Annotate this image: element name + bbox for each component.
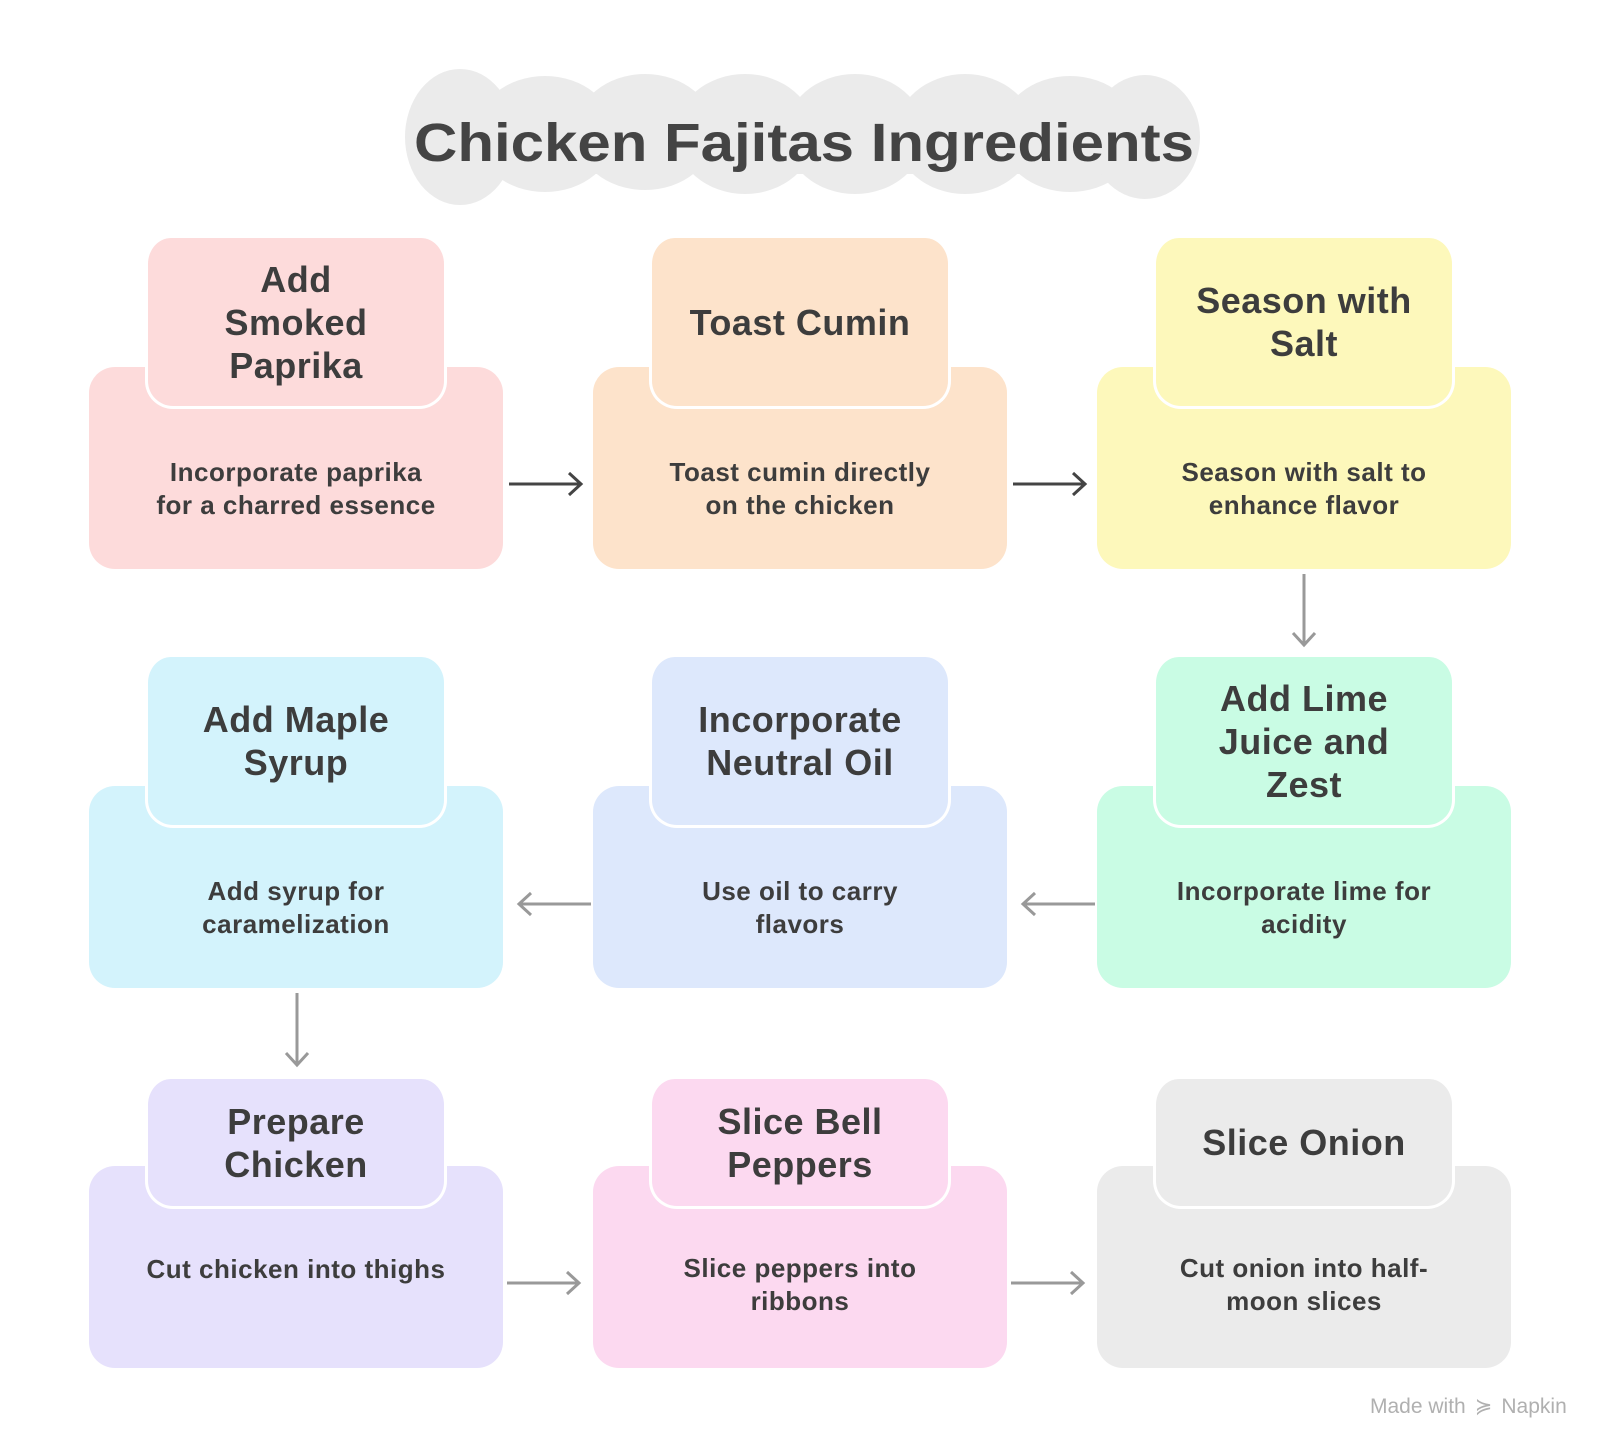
card: Add Smoked Paprika: for a charred essence — [156, 490, 436, 520]
arrow: salt down to lime — [1292, 574, 1316, 648]
card: Add Maple Syrup: Syrup — [244, 742, 348, 783]
card: Slice Onion: moon slices — [1226, 1286, 1382, 1316]
card: Add Smoked Paprika: Add — [260, 258, 332, 300]
card: Season with Salt: Season with — [1196, 280, 1412, 321]
title: Chicken Fajitas Ingredients — [414, 113, 1194, 173]
card: Add Smoked Paprika: Incorporate paprika — [170, 456, 422, 486]
card: Add Lime Juice and Zest: Add Lime — [1220, 678, 1388, 718]
watermark: ≽ — [1475, 1395, 1492, 1418]
card: Slice Bell Peppers: Slice peppers into — [684, 1253, 916, 1283]
card: Add Maple Syrup: Add Maple — [203, 699, 389, 740]
arrow: chicken to peppers — [507, 1271, 581, 1295]
card: Incorporate Neutral Oil: flavors — [756, 908, 844, 938]
arrow: syrup down to chicken — [285, 993, 309, 1068]
card: Incorporate Neutral Oil — [593, 657, 1007, 988]
card: Incorporate Neutral Oil: Incorporate — [698, 699, 902, 740]
arrow: peppers to onion — [1011, 1271, 1085, 1295]
card: Slice Onion — [1097, 1079, 1511, 1368]
card: Add Lime Juice and Zest: Juice and — [1219, 720, 1389, 762]
card: Slice Bell Peppers: Slice Bell — [717, 1100, 883, 1142]
card: Season with Salt — [1097, 238, 1511, 569]
watermark: Made with Napkin — [1370, 1395, 1567, 1418]
card: Add Lime Juice and Zest — [1097, 657, 1511, 988]
card: Season with Salt: Salt — [1270, 323, 1338, 364]
card: Add Lime Juice and Zest: acidity — [1261, 908, 1347, 938]
card: Add Maple Syrup: caramelization — [202, 908, 390, 938]
card: Season with Salt: Season with salt to — [1182, 456, 1426, 486]
card: Slice Bell Peppers: ribbons — [751, 1286, 849, 1316]
card: Prepare Chicken: Prepare — [227, 1100, 365, 1142]
arrow: lime to oil — [1020, 892, 1095, 916]
card: Add Smoked Paprika — [89, 238, 503, 569]
card: Add Lime Juice and Zest: Incorporate lime for — [1177, 876, 1431, 906]
card: Add Maple Syrup — [89, 657, 503, 988]
card: Toast Cumin: on the chicken — [705, 490, 895, 520]
arrow: oil to syrup — [516, 892, 591, 916]
card: Slice Onion: Slice Onion — [1202, 1122, 1406, 1163]
card: Incorporate Neutral Oil: Neutral Oil — [706, 742, 894, 783]
card: Slice Bell Peppers — [593, 1079, 1007, 1368]
card: Slice Onion: Cut onion into half- — [1180, 1253, 1428, 1283]
card: Prepare Chicken — [89, 1079, 503, 1368]
card: Add Lime Juice and Zest: Zest — [1266, 764, 1342, 804]
title — [405, 69, 1200, 205]
card: Prepare Chicken: Cut chicken into thighs — [147, 1254, 445, 1284]
card: Toast Cumin: Toast cumin directly — [670, 456, 930, 486]
card: Slice Bell Peppers: Peppers — [727, 1144, 873, 1184]
card: Add Smoked Paprika: Paprika — [229, 344, 363, 386]
card: Toast Cumin: Toast Cumin — [690, 302, 910, 342]
card: Incorporate Neutral Oil: Use oil to carry — [702, 876, 898, 906]
card: Add Smoked Paprika: Smoked — [224, 302, 368, 342]
card: Add Maple Syrup: Add syrup for — [208, 876, 384, 906]
card: Season with Salt: enhance flavor — [1209, 490, 1399, 520]
arrow: cumin to salt — [1013, 472, 1088, 496]
card: Toast Cumin — [593, 238, 1007, 569]
card: Prepare Chicken: Chicken — [224, 1144, 368, 1184]
arrow: paprika to cumin — [509, 472, 584, 496]
